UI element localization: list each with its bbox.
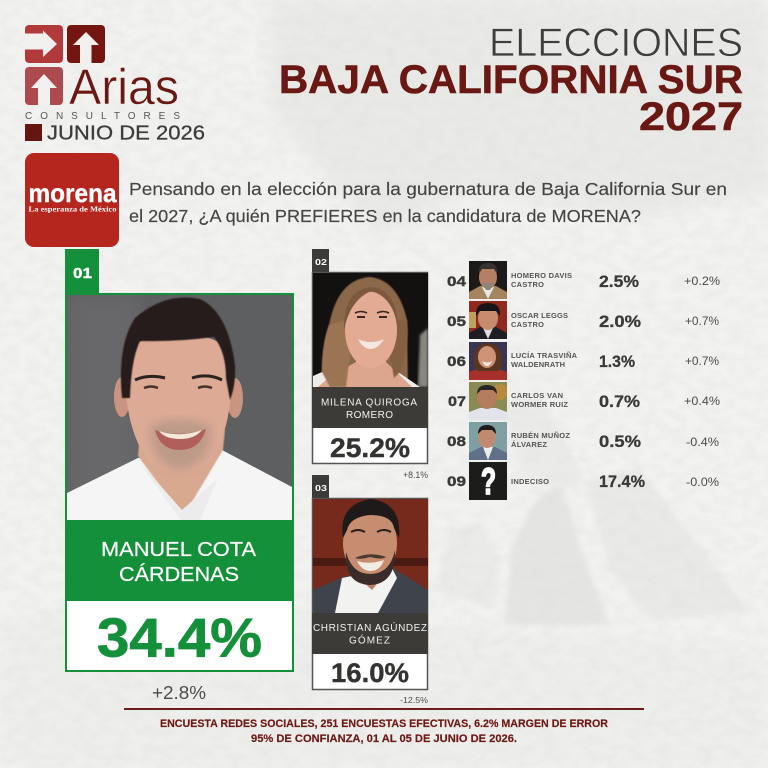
rank tag 01: 01 bbox=[73, 265, 92, 282]
percentage: 16.0% bbox=[331, 658, 409, 688]
row: candidate 04 Homero Davis: HOMERO DAVIS bbox=[511, 271, 572, 280]
row: candidate 06 Lucía Trasviña: 06 bbox=[447, 353, 466, 369]
row: candidate 06 Lucía Trasviña bbox=[447, 342, 719, 380]
row: candidate 05 Oscar Leggs: 2.0% bbox=[599, 312, 641, 331]
row: candidate 07 Carlos Van Wormer: 0.7% bbox=[599, 392, 640, 411]
name block: MILENA QUIROGA bbox=[321, 398, 417, 408]
logo: morena party: La esperanza de México bbox=[28, 206, 117, 214]
name block: CÁRDENAS bbox=[119, 563, 239, 586]
photo: Homero Davis bbox=[469, 261, 507, 299]
row: candidate 06 Lucía Trasviña: 1.3% bbox=[599, 352, 635, 371]
name block: MANUEL COTA bbox=[101, 539, 257, 561]
row: 09 Indeciso: -0.0% bbox=[686, 475, 719, 489]
row: 09 Indeciso: INDECISO bbox=[511, 477, 549, 486]
footer: methodology note: ENCUESTA REDES SOCIALES, 251 ENCUESTAS EFECTIVAS, 6.2% MARGEN DE ERROR bbox=[160, 718, 608, 730]
title: ELECCIONES bbox=[489, 21, 743, 65]
row: candidate 05 Oscar Leggs: 05 bbox=[447, 313, 466, 329]
logo: Arias Consultores bbox=[25, 25, 180, 122]
row: candidate 05 Oscar Leggs: CASTRO bbox=[511, 320, 544, 329]
name block bbox=[65, 520, 294, 601]
logo: morena party bbox=[25, 153, 119, 247]
icon: question mark bbox=[469, 461, 507, 502]
row: candidate 07 Carlos Van Wormer: 07 bbox=[448, 393, 466, 409]
frame bbox=[66, 294, 293, 671]
title: BAJA CALIFORNIA SUR bbox=[279, 58, 743, 102]
row: candidate 08 Rubén Muñoz bbox=[447, 422, 719, 460]
row: candidate 05 Oscar Leggs bbox=[447, 301, 719, 339]
row: candidate 04 Homero Davis: CASTRO bbox=[511, 280, 544, 289]
photo: Manuel Cota bbox=[67, 295, 292, 520]
row: candidate 06 Lucía Trasviña: +0.7% bbox=[685, 354, 719, 368]
change: -12.5%: -12.5% bbox=[400, 695, 428, 705]
percentage: 34.4% bbox=[97, 606, 262, 668]
row: candidate 07 Carlos Van Wormer bbox=[448, 382, 720, 420]
rank tag 03: 03 bbox=[315, 483, 327, 493]
row: candidate 08 Rubén Muñoz: ÁLVAREZ bbox=[511, 440, 547, 449]
icon: up arrow square light bbox=[25, 67, 63, 105]
photo: Milena Quiroga bbox=[313, 273, 428, 387]
row: 09 Indeciso bbox=[447, 461, 719, 502]
row: candidate 05 Oscar Leggs: OSCAR LEGGS bbox=[511, 311, 568, 320]
logo subtitle: CONSULTORES bbox=[25, 111, 180, 122]
row: candidate 08 Rubén Muñoz: 08 bbox=[447, 433, 466, 449]
panel: candidate 03 Christian Agúndez bbox=[312, 475, 428, 690]
rank tag 03 bbox=[312, 475, 329, 499]
name block: ROMERO bbox=[346, 410, 393, 421]
frame bbox=[312, 498, 428, 690]
panel: candidate 01 Manuel Cota bbox=[65, 249, 294, 671]
change: +8.1%: +8.1% bbox=[403, 470, 428, 480]
icon: question mark: ? bbox=[481, 461, 496, 502]
row: candidate 05 Oscar Leggs: +0.7% bbox=[685, 314, 719, 328]
row: candidate 07 Carlos Van Wormer: CARLOS VAN bbox=[511, 391, 563, 400]
photo: Lucía Trasviña bbox=[469, 342, 507, 380]
name block bbox=[312, 613, 428, 654]
name block bbox=[312, 387, 428, 428]
rank tag 02 bbox=[312, 249, 329, 273]
date: JUNIO DE 2026 bbox=[47, 122, 205, 144]
logo wordmark: Arias bbox=[69, 59, 179, 115]
icon: right arrow square bbox=[25, 25, 63, 63]
row: candidate 07 Carlos Van Wormer: WORMER RUIZ bbox=[511, 400, 568, 409]
rank tag 01 bbox=[65, 249, 99, 294]
rank tag 02: 02 bbox=[315, 257, 327, 267]
change: +2.8%: +2.8% bbox=[152, 683, 206, 703]
row: 09 Indeciso: 17.4% bbox=[599, 472, 645, 491]
name block: CHRISTIAN AGÚNDEZ bbox=[313, 621, 427, 634]
row: candidate 06 Lucía Trasviña: LUCÍA TRASVIÑA bbox=[511, 351, 578, 360]
row: candidate 08 Rubén Muñoz: 0.5% bbox=[599, 432, 641, 451]
title bbox=[279, 21, 743, 139]
row: candidate 08 Rubén Muñoz: RUBÉN MUÑOZ bbox=[511, 431, 570, 440]
logo: morena party: morena bbox=[28, 178, 117, 208]
icon: up arrow square dark bbox=[67, 25, 105, 63]
photo: Rubén Muñoz bbox=[469, 422, 507, 460]
row: candidate 04 Homero Davis: +0.2% bbox=[684, 274, 720, 288]
survey question bbox=[129, 179, 727, 226]
row: 09 Indeciso: 09 bbox=[447, 473, 466, 489]
row: candidate 08 Rubén Muñoz: -0.4% bbox=[686, 435, 719, 449]
row: candidate 06 Lucía Trasviña: WALDENRATH bbox=[511, 360, 565, 369]
survey question: el 2027, ¿A quién PREFIERES en la candidatura de MORENA? bbox=[129, 206, 641, 226]
frame bbox=[312, 272, 428, 464]
name block: GÓMEZ bbox=[349, 634, 390, 646]
percentage: 25.2% bbox=[330, 433, 410, 463]
photo: Christian Agúndez bbox=[313, 499, 428, 613]
footer: methodology note: 95% DE CONFIANZA, 01 AL 05 DE JUNIO DE 2026. bbox=[251, 733, 517, 745]
row: candidate 04 Homero Davis bbox=[447, 261, 720, 299]
row: candidate 07 Carlos Van Wormer: +0.4% bbox=[684, 394, 720, 408]
survey question: Pensando en la elección para la gubernatura de Baja California Sur en bbox=[129, 179, 727, 199]
row: candidate 04 Homero Davis: 2.5% bbox=[599, 272, 639, 291]
footer: methodology note bbox=[124, 708, 644, 745]
row: candidate 04 Homero Davis: 04 bbox=[447, 273, 466, 289]
panel: candidate 02 Milena Quiroga bbox=[312, 249, 428, 464]
photo: Carlos Van Wormer bbox=[469, 382, 508, 420]
photo: Oscar Leggs bbox=[469, 301, 507, 339]
title: 2027 bbox=[639, 95, 743, 139]
